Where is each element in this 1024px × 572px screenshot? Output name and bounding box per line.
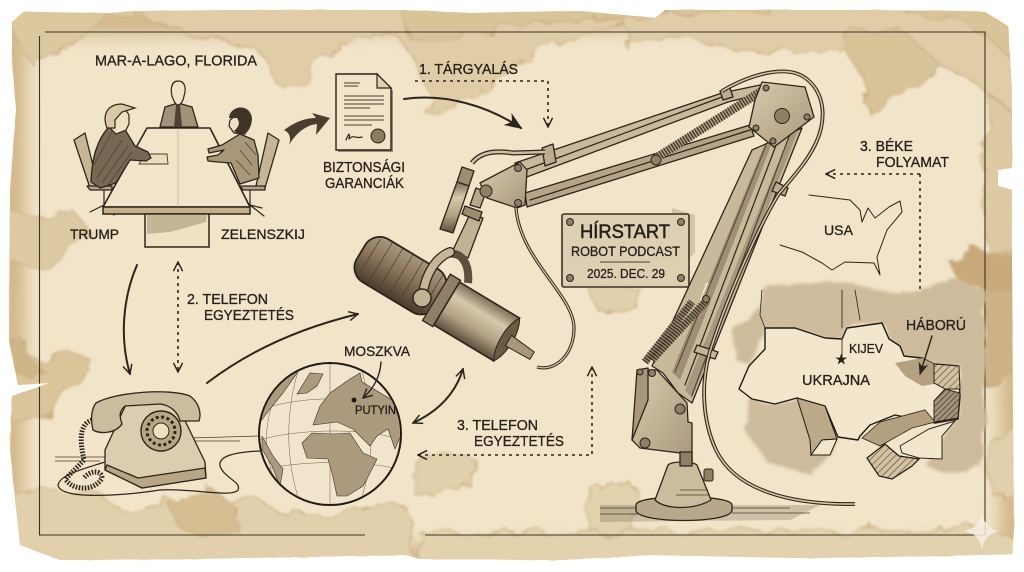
Ukraine territory: [739, 323, 960, 440]
upper spring: [651, 89, 765, 165]
dotted double arrow: phone coordination: [177, 262, 179, 372]
plate title: HÍRSTART: [580, 222, 670, 243]
label: Putin: PUTYIN: [355, 403, 396, 417]
label: second phone call: [187, 292, 294, 324]
mic support tube and side cylinder: [440, 152, 545, 258]
coiled handset cord: [66, 420, 102, 488]
label: peace process: [860, 138, 949, 171]
meeting table illustration: [74, 81, 279, 247]
occupied: south: [862, 410, 935, 446]
label: Kyiv: KIJEV: [849, 341, 883, 356]
label: Zelensky: ZELENSZKIJ: [221, 226, 305, 242]
Greenland: [297, 373, 323, 394]
dotted arrow: third phone call: [418, 367, 592, 455]
label: security guarantees: GARANCIÁK: [325, 175, 404, 192]
clip on lower arm top: [772, 182, 788, 196]
icon: sparkle watermark: [963, 512, 1001, 550]
figure: centre person: [160, 81, 198, 127]
label: third phone call: EGYEZTETÉS: [474, 433, 564, 450]
mic back ring: [450, 254, 468, 283]
mic cable: [516, 208, 574, 368]
label: Trump: TRUMP: [70, 226, 119, 242]
label: Ukraine: UKRAJNA: [802, 373, 870, 389]
double arrow: globe and microphone: [413, 369, 463, 423]
handset: [92, 392, 200, 432]
lower arm beams: [652, 128, 802, 403]
upper cable: [704, 71, 855, 504]
dotted arrow: first talks: [415, 81, 548, 127]
Crimea: [867, 444, 919, 479]
phone base: [105, 400, 206, 488]
label: second phone call: EGYEZTETÉS: [204, 307, 294, 324]
label: USA: USA: [824, 222, 854, 238]
clip on lower arm: [694, 345, 718, 359]
map: Ukraine and surroundings: [734, 278, 985, 479]
label: peace process: 3. BÉKE: [860, 138, 913, 155]
icon: rotary telephone: [55, 392, 260, 495]
dial: [141, 411, 181, 451]
Moldova: [797, 398, 837, 455]
plate: podcast nameplate: [562, 208, 695, 287]
grey land wash: [734, 278, 985, 475]
top pivot plate: [749, 82, 814, 147]
label: Moscow: MOSZKVA: [344, 343, 411, 359]
label: war: HÁBORÚ: [906, 317, 966, 334]
stand base: [600, 452, 820, 522]
arrow: document to microphone arm: [404, 98, 521, 128]
label: security guarantees: [323, 159, 405, 192]
label: third phone call: 3. TELEFON: [457, 418, 538, 434]
northern border lines: [760, 290, 860, 358]
Africa: [302, 433, 377, 496]
head bracket plate: [480, 162, 527, 208]
arrow: war zone: [920, 336, 932, 374]
icon: Kyiv star: ★: [835, 352, 848, 368]
map: USA outline: [780, 195, 902, 275]
upper arm beams: [515, 85, 764, 207]
occupied: Donetsk: [934, 389, 960, 422]
arrow: meeting to document: [284, 113, 330, 145]
microphone body: [347, 229, 546, 378]
location heading: MAR-A-LAGO, FLORIDA: [95, 52, 257, 70]
label: second phone call: 2. TELEFON: [187, 292, 268, 308]
table: [103, 128, 250, 247]
arrow: meeting to phone: [124, 265, 137, 374]
plate date: 2025. DEC. 29: [587, 267, 665, 281]
chair: Zelensky: [240, 133, 279, 216]
Odesa region: [811, 439, 837, 455]
label: security guarantees: BIZTONSÁGI: [323, 159, 405, 176]
Eurasia: [313, 373, 402, 449]
lower springs: [645, 296, 710, 362]
North America: [261, 372, 298, 422]
plate subtitle: ROBOT PODCAST: [571, 244, 680, 259]
phone cord: [58, 451, 260, 495]
arrow: to Moscow: [363, 362, 381, 398]
chair: Trump: [74, 133, 114, 215]
icon: document with seal: [336, 74, 393, 152]
icon: Moscow dot: [352, 398, 356, 402]
figure: Trump: [91, 104, 151, 188]
dotted arrows: peace process: [826, 174, 920, 292]
label: first talks: 1. TÁRGYALÁS: [419, 61, 518, 78]
label: third phone call: [457, 418, 564, 450]
microphone boom arm: [347, 71, 855, 522]
South America: [262, 436, 283, 486]
mic front ring with knob: [413, 252, 450, 307]
figure: Zelensky: [207, 107, 259, 184]
arrow: phone to microphone: [207, 314, 358, 383]
occupied: Kharkiv stain: [895, 358, 934, 386]
label: peace process: FOLYAMAT: [876, 155, 949, 171]
sea of Azov shore: [900, 421, 955, 459]
globe: [258, 363, 402, 505]
lower arm bracket: [632, 368, 692, 463]
occupied: Luhansk: [934, 364, 960, 389]
